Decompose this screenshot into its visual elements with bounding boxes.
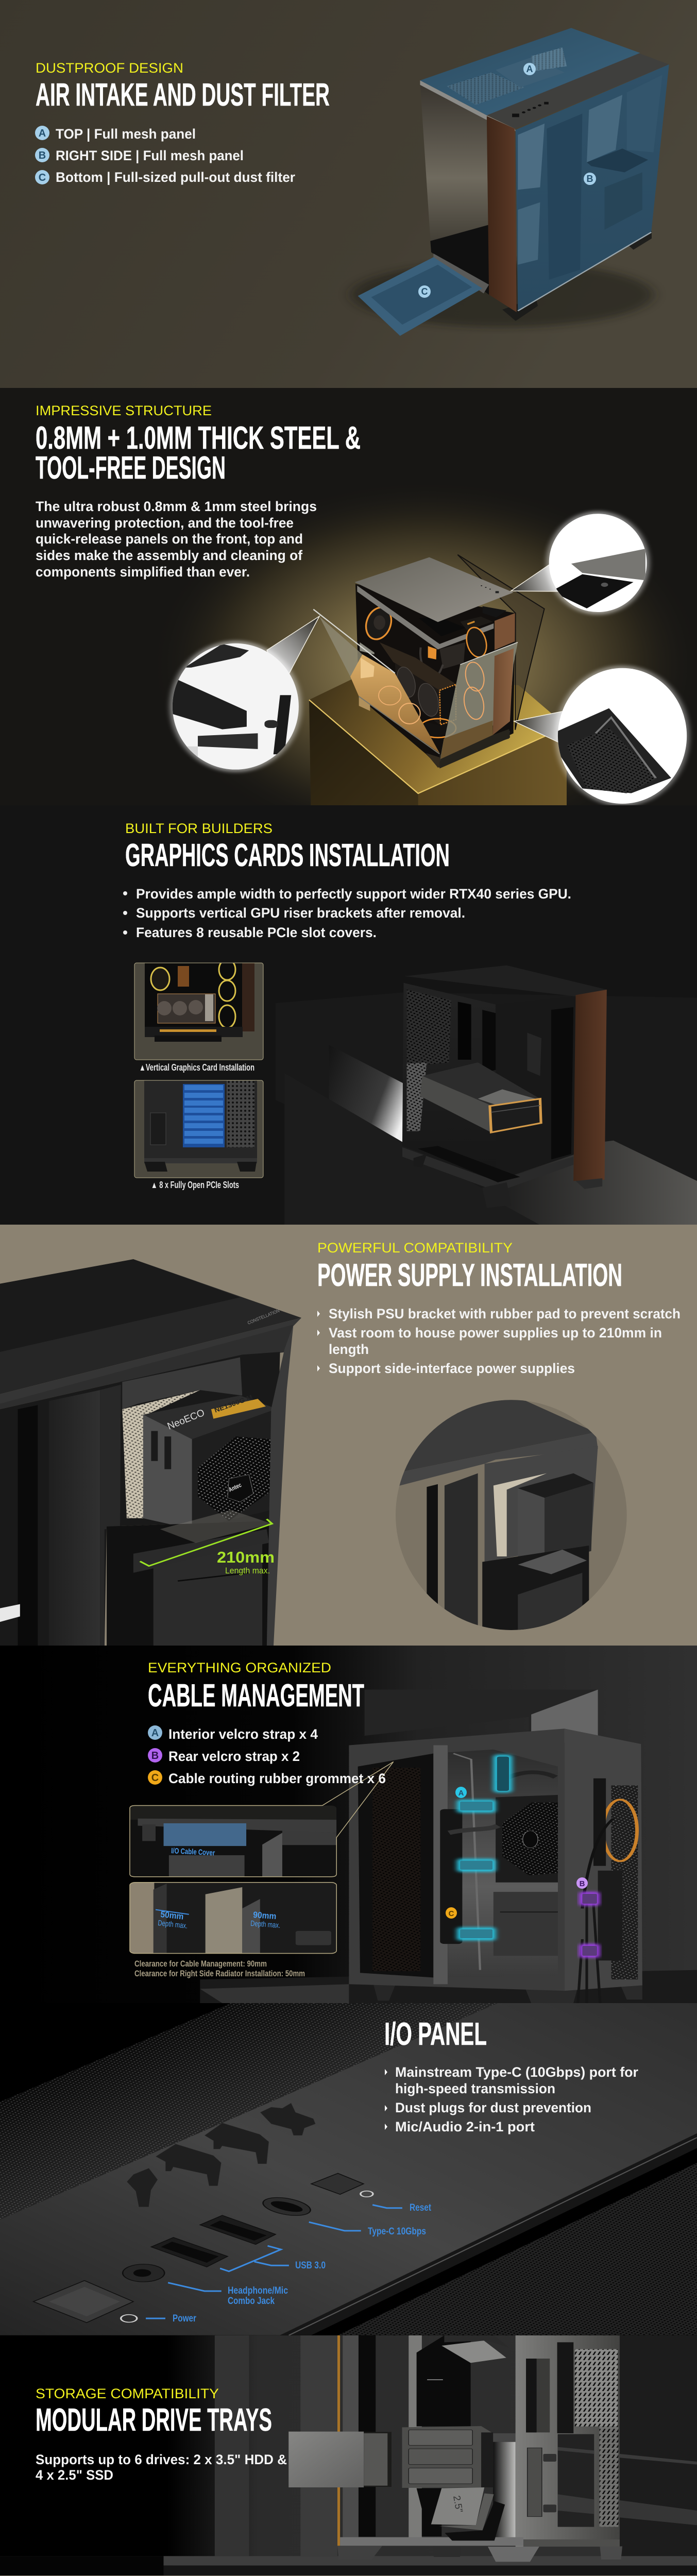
illustration: tower on gold pedestal (309, 555, 567, 805)
feature list: B (39, 150, 46, 161)
heading: AIR INTAKE AND DUST FILTER (36, 77, 330, 113)
dust plugs (127, 2103, 316, 2207)
eyebrow: IMPRESSIVE STRUCTURE (36, 403, 212, 418)
wall and floor (0, 2335, 697, 2575)
bullet list: Vast room to house power supplies up to 210mm in (329, 1325, 662, 1341)
clearance notes: Clearance for Cable Management: 90mm (134, 1959, 267, 1969)
heading: GRAPHICS CARDS INSTALLATION (125, 838, 450, 873)
cyan strap highlights (457, 1755, 512, 1940)
description text: components simplified than ever. (36, 564, 250, 580)
dimension label (217, 1548, 275, 1575)
2.5 inch drive (431, 2487, 505, 2540)
illustration: front panel ports and dust plugs (0, 2003, 697, 2335)
illustration: open tower with graphics card (276, 965, 697, 1226)
description text: Supports up to 6 drives: 2 x 3.5" HDD & (36, 2452, 287, 2467)
description text: sides make the assembly and cleaning of (36, 548, 303, 563)
bullet list: Dust plugs for dust prevention (395, 2100, 591, 2115)
illustration: tower with blue mesh highlights and dust filter (351, 28, 669, 336)
wood panel (495, 613, 515, 650)
caption: ▲ 8 x Fully Open PCIe Slots (151, 1180, 239, 1190)
port labels: Power (173, 2313, 196, 2324)
feature list: C (151, 1772, 159, 1784)
illustration: tower with cable straps and inset photos (130, 1690, 697, 2003)
panel: power supply installation (0, 1225, 697, 1646)
inset photo: clearances (130, 1883, 336, 1954)
heading: I/O PANEL (384, 2016, 487, 2052)
port labels: Reset (410, 2202, 432, 2213)
callout wedges (267, 563, 565, 744)
port labels: Combo Jack (228, 2296, 275, 2307)
inset photo: cable cover (130, 1806, 336, 1877)
detail bubbles (170, 511, 689, 806)
panel: air intake and dust filter (0, 0, 697, 388)
illustration: tower with drive trays (0, 2335, 697, 2575)
thumbnail border (134, 1080, 263, 1178)
port labels: USB 3.0 (295, 2260, 326, 2271)
bullet list: Stylish PSU bracket with rubber pad to prevent scratch (329, 1306, 681, 1321)
panel: graphics cards installation (0, 805, 697, 1225)
panel: extensive interior (0, 2575, 697, 2576)
panel: cable management (0, 1646, 697, 2003)
illustration: tower rear with power supply (0, 1259, 628, 1649)
rear glass panel (457, 555, 545, 730)
power supply labels: NeoECO (166, 1408, 206, 1432)
marker labels on tower (418, 63, 596, 298)
feature list: RIGHT SIDE | Full mesh panel (56, 148, 244, 163)
thumbnail: vertical graphics card (134, 959, 263, 1060)
thumbnail: PCIe slots (134, 1080, 263, 1178)
heading: 0.8MM + 1.0MM THICK STEEL & (36, 420, 361, 456)
feature list: TOP | Full mesh panel (56, 126, 196, 142)
dimension label: Length max. (225, 1566, 270, 1575)
port labels (173, 2202, 432, 2324)
bullet list: Support side-interface power supplies (329, 1361, 575, 1376)
feet (337, 2546, 622, 2562)
heading (36, 420, 361, 486)
inset border and callout (130, 1762, 394, 1877)
power button cap (49, 2287, 120, 2316)
description text (36, 499, 317, 580)
port openings (133, 2199, 306, 2277)
purple strap highlights (579, 1892, 600, 1958)
eyebrow: STORAGE COMPATIBILITY (36, 2386, 219, 2401)
power supply labels: CONSTELLATION (247, 1308, 280, 1326)
dimension label: 210mm (217, 1548, 275, 1566)
bullet list: Supports vertical GPU riser brackets after removal. (136, 905, 465, 921)
3.5 inch drive (288, 2432, 392, 2487)
eyebrow: POWERFUL COMPATIBILITY (317, 1240, 513, 1256)
feature list: C (39, 172, 46, 183)
marker labels on tower: A (526, 64, 533, 74)
graphics card (380, 642, 456, 740)
inset border (130, 1883, 336, 1954)
top panel (354, 557, 514, 622)
eyebrow: BUILT FOR BUILDERS (125, 821, 273, 836)
panel: thick steel and tool-free design (0, 388, 697, 805)
inset labels: Depth max. (158, 1919, 188, 1930)
drive cage (402, 2426, 493, 2488)
marker labels on tower: C (421, 286, 428, 297)
description text: 4 x 2.5" SSD (36, 2467, 113, 2483)
power supply labels: NE1300G M (213, 1393, 253, 1414)
rear panel (578, 1778, 638, 2003)
detail bubble: side panel (171, 642, 300, 771)
bullet list: length (329, 1342, 369, 1357)
bullet list (123, 886, 571, 940)
feature list: Bottom | Full-sized pull-out dust filter (56, 170, 295, 185)
power supply labels (166, 1308, 280, 1494)
eyebrow: EVERYTHING ORGANIZED (148, 1660, 331, 1675)
detail bubble: top panel (547, 513, 649, 615)
inset labels: 50mm (160, 1909, 184, 1922)
thumbnail border (134, 963, 263, 1060)
feature list (148, 1725, 386, 1786)
inset labels: 90mm (253, 1910, 277, 1921)
eyebrow: DUSTPROOF DESIGN (36, 60, 183, 76)
heading: CABLE MANAGEMENT (148, 1678, 364, 1714)
port labels: Headphone/Mic (228, 2285, 288, 2296)
clearance notes: Clearance for Right Side Radiator Installation: 50mm (134, 1969, 305, 1978)
marker labels on tower: B (586, 174, 593, 184)
heading: MODULAR DRIVE TRAYS (36, 2402, 272, 2438)
bullet list (385, 2064, 638, 2134)
caption: ▲Vertical Graphics Card Installation (139, 1062, 254, 1073)
pedestal (309, 676, 567, 805)
panel: modular drive trays (0, 2335, 697, 2575)
case frame (337, 2335, 620, 2547)
feature list (35, 126, 295, 185)
description text (36, 2452, 287, 2483)
inset labels (158, 1846, 281, 1930)
bullet list: Mainstream Type-C (10Gbps) port for (395, 2064, 638, 2080)
bullet list (317, 1306, 681, 1376)
bullet list: Features 8 reusable PCIe slot covers. (136, 925, 377, 940)
feature list: Cable routing rubber grommet x 6 (168, 1771, 386, 1786)
feature list: B (151, 1750, 159, 1761)
panel: I/O panel (0, 2003, 697, 2335)
heading: TOOL-FREE DESIGN (36, 450, 226, 486)
bullet list: high-speed transmission (395, 2081, 555, 2096)
port labels: Type-C 10Gbps (368, 2226, 426, 2237)
feature list: Interior velcro strap x 4 (168, 1726, 318, 1742)
tower strap markers: A (458, 1789, 464, 1798)
tower strap markers (446, 1787, 588, 1919)
description text: unwavering protection, and the tool-free (36, 515, 294, 531)
clearance notes (134, 1959, 305, 1978)
inset labels: I/O Cable Cover (171, 1846, 215, 1857)
inset circle (395, 1398, 628, 1632)
power supply labels: Antec (227, 1481, 243, 1494)
inset labels: Depth max. (250, 1919, 281, 1930)
bullet list: Mic/Audio 2-in-1 port (395, 2119, 535, 2134)
feature list: A (39, 128, 46, 139)
left glass panel (313, 609, 439, 754)
description text: The ultra robust 0.8mm & 1mm steel brings (36, 499, 317, 514)
right glass panel (439, 642, 518, 762)
drive label: 2.5" (451, 2495, 465, 2514)
feature list: Rear velcro strap x 2 (168, 1749, 300, 1764)
blue leader lines (146, 2205, 402, 2318)
detail bubble: chassis corner (547, 668, 689, 804)
feature list: A (151, 1727, 159, 1739)
tower strap markers: B (580, 1879, 585, 1888)
description text: quick-release panels on the front, top and (36, 531, 303, 547)
bullet list: Provides ample width to perfectly support wider RTX40 series GPU. (136, 886, 571, 902)
case body (355, 584, 515, 769)
icons (121, 2191, 373, 2322)
ports (33, 2173, 364, 2323)
tower strap markers: C (449, 1909, 454, 1918)
